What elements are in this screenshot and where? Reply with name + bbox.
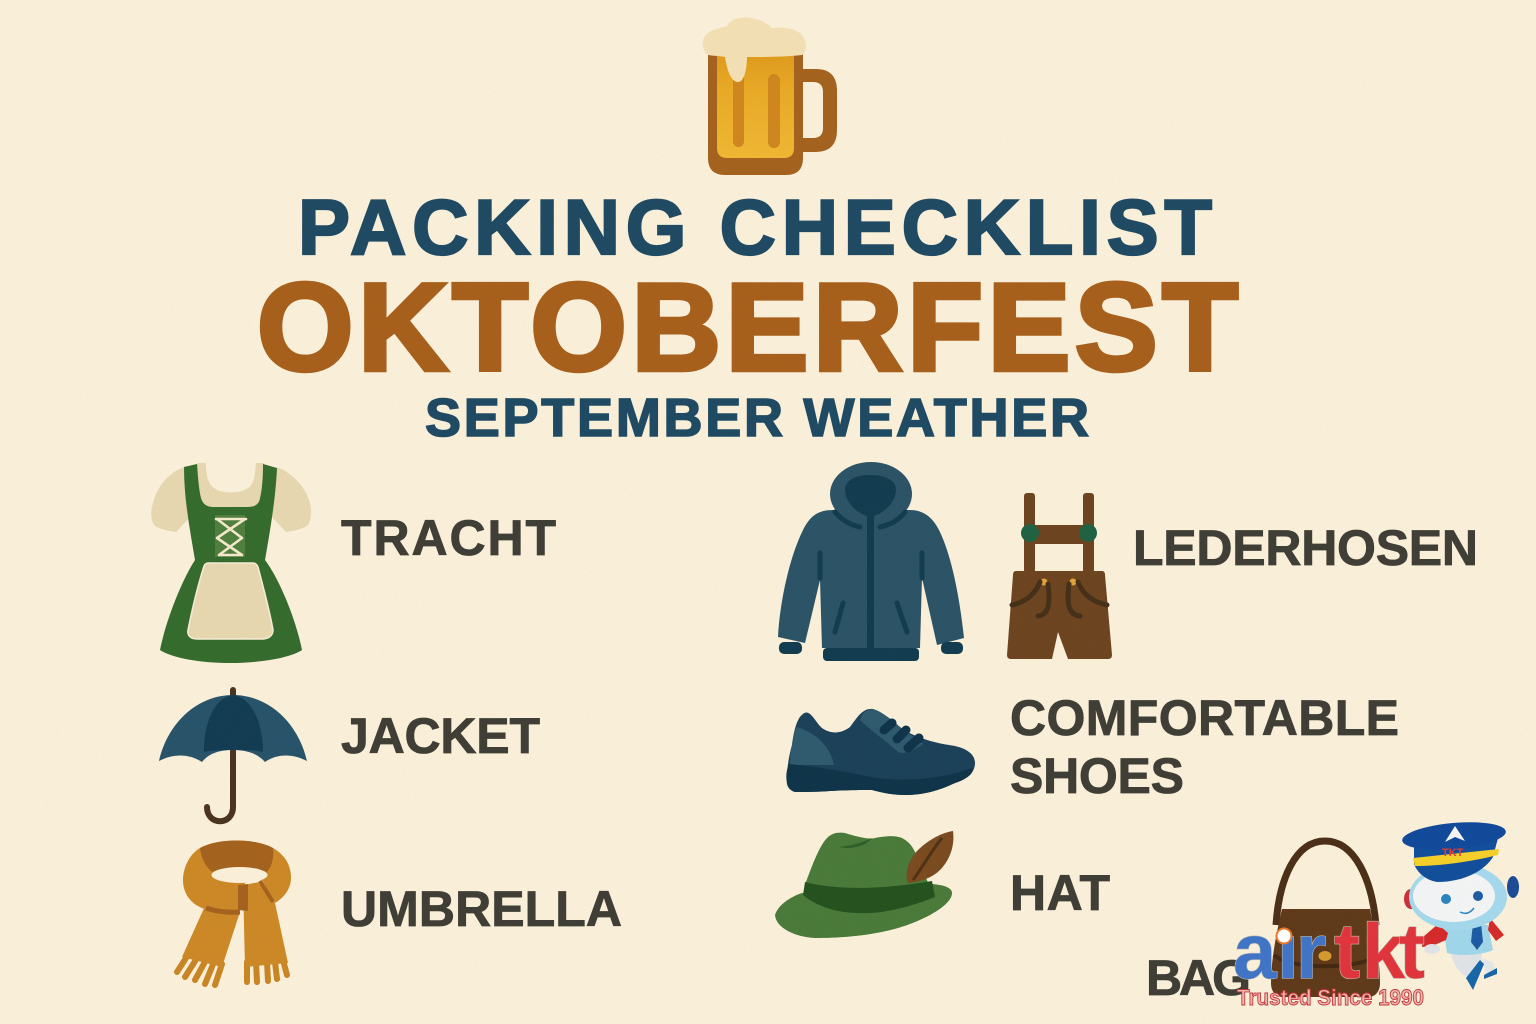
logo: airtkt: aır [1233,907,1326,995]
logo: airtkt [1233,907,1425,1010]
icon: hat [775,831,953,938]
label: jacket: JACKET [341,708,540,764]
title: packing checklist: PACKING CHECKLIST [298,183,1212,271]
label: comfortable shoes: SHOES [1010,748,1184,804]
label: bag: BAG [1146,950,1251,1006]
icon: dirndl dress [151,463,311,663]
label: tracht: TRACHT [341,510,556,566]
label: umbrella: UMBRELLA [341,881,622,937]
label: lederhosen: LEDERHOSEN [1133,520,1478,576]
icon: hooded jacket [778,462,964,661]
label: hat: HAT [1010,865,1110,921]
mascot: pilot character [1401,819,1519,990]
subtitle: september weather: SEPTEMBER WEATHER [425,388,1089,448]
icon: shoe [786,709,975,795]
icon: beer mug [703,17,837,175]
icon: lederhosen [1007,493,1112,659]
icon: bag [1271,841,1380,997]
icon: umbrella [159,690,307,821]
title: oktoberfest: OKTOBERFEST [257,259,1238,397]
logo: airtkt: Trusted Since 1990 [1237,985,1424,1010]
label: comfortable shoes [1010,690,1399,804]
icon: scarf [177,840,291,985]
logo: airtkt: tkt [1334,907,1425,995]
mascot: pilot character: TKT [1442,847,1464,859]
label: comfortable shoes: COMFORTABLE [1010,690,1399,746]
